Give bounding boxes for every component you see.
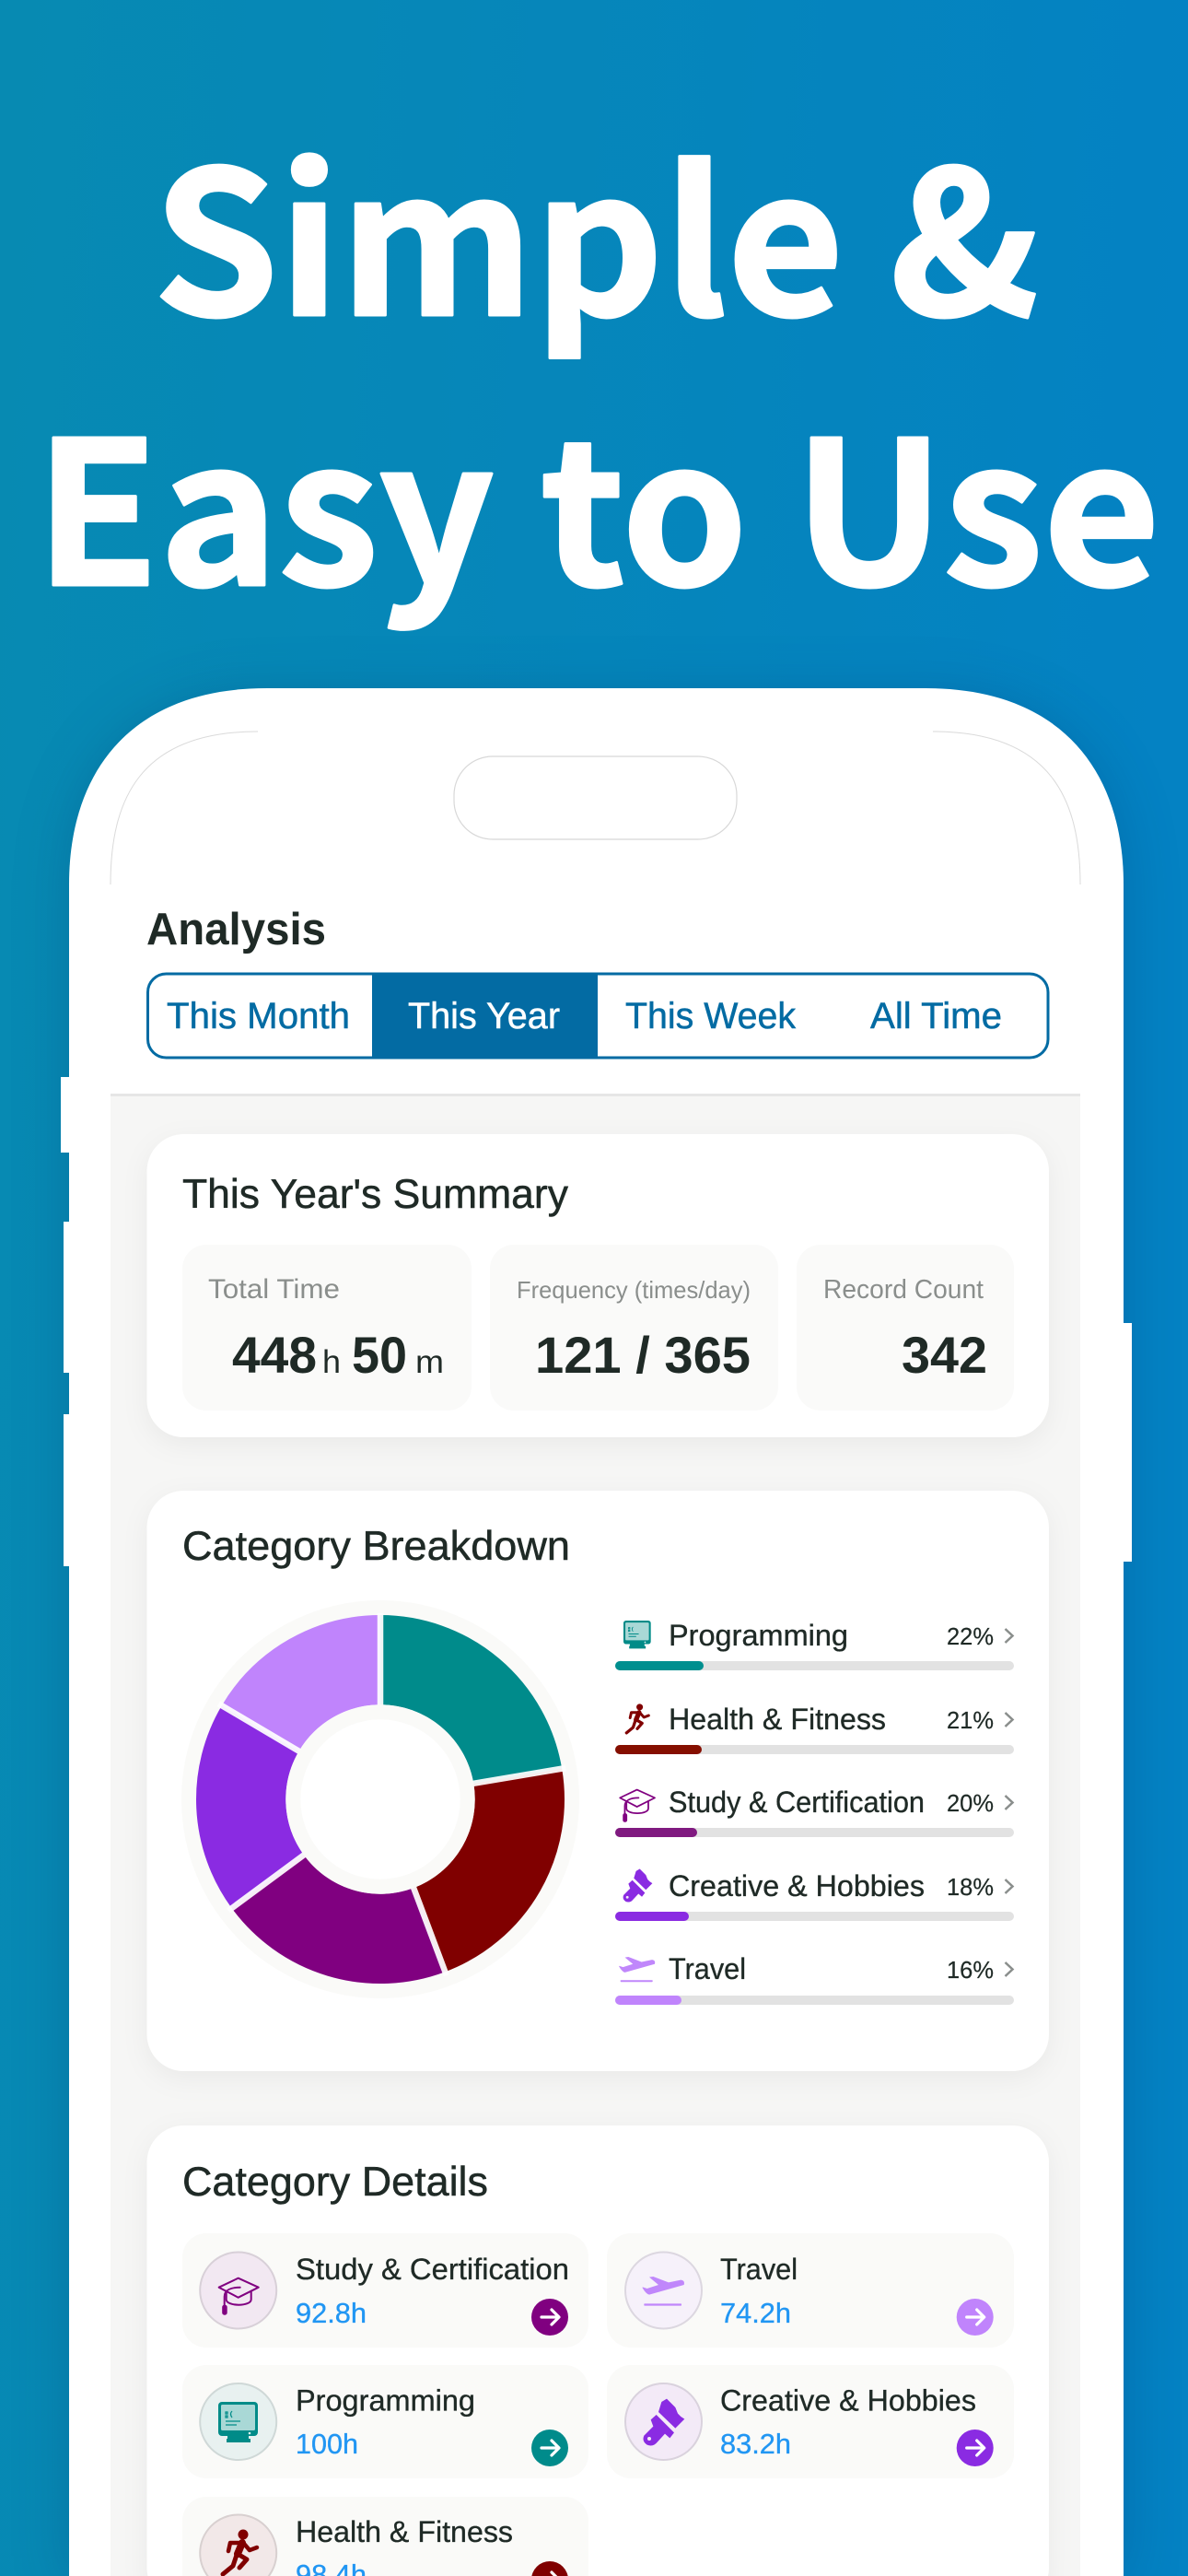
stat: total time: Total Time <box>208 1274 340 1305</box>
screen outline arcs <box>111 732 1080 884</box>
row: creative and hobbies: 18% <box>947 1875 994 1901</box>
card: creative and hobbies: Creative & Hobbies <box>720 2384 976 2418</box>
stat: record count: 342 <box>902 1326 987 1384</box>
title: Simple & <box>153 85 1039 373</box>
row: travel: 16% <box>947 1958 994 1984</box>
card: creative and hobbies <box>607 2365 1014 2478</box>
row: creative and hobbies <box>615 1868 1014 1921</box>
stat: frequency: Frequency (times/day) <box>517 1276 751 1304</box>
stat: total time: h <box>322 1344 341 1380</box>
segmented period tabs: This Week <box>625 996 797 1036</box>
phone side buttons <box>61 1077 1132 1566</box>
card: programming: Programming <box>296 2384 475 2418</box>
row: programming: Programming <box>669 1619 848 1652</box>
title <box>35 85 1160 643</box>
panel: category details <box>147 2125 1049 2576</box>
panel: this year's summary <box>147 1134 1049 1437</box>
card: travel: 74.2h <box>720 2297 791 2329</box>
stat: record count: Record Count <box>823 1275 984 1305</box>
row: travel: Travel <box>669 1952 746 1985</box>
segmented period tabs: This Month <box>167 996 350 1036</box>
row: health and fitness: 21% <box>947 1708 994 1734</box>
row: travel <box>615 1952 1014 2005</box>
row: health and fitness: Health & Fitness <box>669 1703 886 1736</box>
phone mockup <box>61 688 1132 2576</box>
heading: category breakdown: Category Breakdown <box>182 1524 570 1569</box>
card: study and certification <box>182 2233 588 2348</box>
card: travel: Travel <box>720 2253 798 2286</box>
screen content background <box>111 1095 1080 2576</box>
heading: Analysis: Analysis <box>146 904 326 954</box>
card: study and certification: Study & Certification <box>296 2253 569 2286</box>
card: travel <box>607 2233 1014 2348</box>
row: programming <box>615 1619 1014 1670</box>
heading: this year's summary: This Year's Summary <box>182 1172 569 1217</box>
segmented period tabs <box>147 973 1048 1059</box>
stat: total time <box>182 1245 472 1411</box>
camera notch <box>454 756 737 839</box>
panel: category breakdown <box>147 1491 1049 2071</box>
title: Easy to Use <box>35 355 1160 643</box>
segmented period tabs: All Time <box>870 996 1002 1036</box>
row: study and certification: Study & Certification <box>669 1786 925 1819</box>
card: study and certification: 92.8h <box>296 2297 367 2329</box>
card: health and fitness: Health & Fitness <box>296 2515 513 2548</box>
row: health and fitness <box>615 1703 1014 1754</box>
row: study and certification <box>615 1786 1014 1837</box>
segmented period tabs: This Year <box>408 996 560 1036</box>
stat: total time: 50 <box>352 1326 407 1384</box>
phone body <box>69 688 1124 2576</box>
card: health and fitness <box>182 2497 588 2576</box>
heading: category details: Category Details <box>182 2160 488 2205</box>
row: creative and hobbies: Creative & Hobbies <box>669 1869 925 1903</box>
card: creative and hobbies: 83.2h <box>720 2428 791 2460</box>
donut chart <box>181 1600 579 1998</box>
stat: total time: m <box>415 1344 444 1380</box>
stat: frequency: 121 / 365 <box>535 1326 751 1384</box>
card: programming <box>182 2365 588 2478</box>
stat: frequency <box>490 1245 778 1411</box>
category list <box>615 1619 1014 2005</box>
stat: total time: 448 <box>232 1326 317 1384</box>
stat: record count <box>797 1245 1014 1411</box>
row: study and certification: 20% <box>947 1791 994 1817</box>
row: programming: 22% <box>947 1624 994 1650</box>
card: programming: 100h <box>296 2428 358 2460</box>
